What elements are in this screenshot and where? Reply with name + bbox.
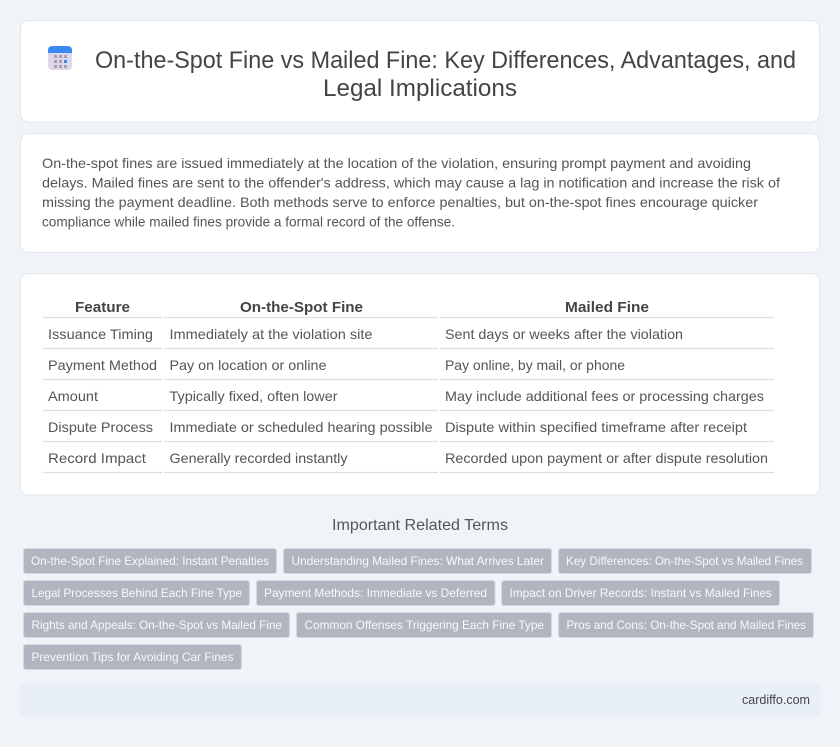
tag: Understanding Mailed Fines: What Arrives Later: [292, 554, 544, 568]
table row: issuance timing: Immediately at the violation site: [170, 326, 373, 342]
table row: record impact: Record Impact: [48, 450, 146, 466]
heading: important related terms: Important Related Terms: [332, 517, 508, 534]
table row: issuance timing: [48, 326, 683, 342]
tag: [24, 612, 290, 638]
tag: [24, 548, 276, 574]
footer bar: cardiffo.com: [742, 693, 810, 707]
table row: record impact: Recorded upon payment or after dispute resolution: [445, 450, 768, 466]
table row: amount: Typically fixed, often lower: [170, 388, 338, 404]
table row: dispute process: [48, 419, 747, 435]
table row: amount: May include additional fees or processing charges: [445, 388, 764, 404]
tag: Impact on Driver Records: Instant vs Mailed Fines: [510, 586, 772, 600]
title: Legal Implications: [323, 75, 517, 102]
table row: payment method: [48, 357, 625, 373]
tag: [558, 548, 812, 574]
title: On-the-Spot Fine vs Mailed Fine: Key Differences, Advantages, and: [95, 47, 796, 74]
table header row: On-the-Spot Fine: [240, 299, 363, 316]
panel: summary paragraph: delays. Mailed fines are sent to the offender's address, which may cause a lag in notification and increase the risk of: [42, 174, 780, 190]
tag: Legal Processes Behind Each Fine Type: [32, 586, 242, 600]
tag: [256, 580, 495, 606]
tag: [296, 612, 552, 638]
icon: calendar: [48, 46, 72, 70]
tag: [24, 580, 250, 606]
table row: record impact: Generally recorded instantly: [170, 450, 348, 466]
tag: On-the-Spot Fine Explained: Instant Penalties: [31, 554, 269, 568]
footer bar: [20, 683, 820, 717]
tag: Rights and Appeals: On-the-Spot vs Mailed Fine: [32, 618, 282, 632]
tag: Prevention Tips for Avoiding Car Fines: [32, 650, 234, 664]
table row: amount: Amount: [48, 388, 98, 404]
related term tags: [24, 548, 814, 670]
table row: dispute process: Immediate or scheduled hearing possible: [170, 419, 433, 435]
tag: Pros and Cons: On-the-Spot and Mailed Fines: [566, 618, 806, 632]
tag: Common Offenses Triggering Each Fine Type: [304, 618, 544, 632]
tag: [558, 612, 814, 638]
tag: [24, 644, 242, 670]
tag: [284, 548, 552, 574]
tag: Payment Methods: Immediate vs Deferred: [264, 586, 487, 600]
table row: amount: [48, 388, 764, 404]
panel: summary paragraph: missing the payment deadline. Both methods serve to enforce penalties, but on-the-spot fines encourage quicker: [42, 194, 758, 210]
table row: dispute process: Dispute within specified timeframe after receipt: [445, 419, 747, 435]
table row: payment method: Payment Method: [48, 357, 157, 373]
table header row: [75, 299, 649, 316]
panel: comparison table: [20, 274, 820, 495]
table header row: Feature: [75, 299, 130, 316]
table row: issuance timing: Sent days or weeks after the violation: [445, 326, 683, 342]
panel: summary paragraph: On-the-spot fines are issued immediately at the location of the violation, ensuring prompt payment and avoiding: [42, 155, 751, 171]
table row: record impact: [48, 450, 768, 466]
table row: issuance timing: Issuance Timing: [48, 326, 153, 342]
table header row: Mailed Fine: [565, 299, 649, 316]
title: [95, 47, 796, 102]
table row: dispute process: Dispute Process: [48, 419, 153, 435]
panel: title header: [20, 20, 820, 122]
table row: payment method: Pay on location or online: [170, 357, 327, 373]
tag: Key Differences: On-the-Spot vs Mailed Fines: [566, 554, 803, 568]
panel: summary paragraph: compliance while mailed fines provide a formal record of the offense.: [42, 214, 455, 230]
tag: [502, 580, 780, 606]
panel: summary paragraph: [20, 134, 820, 252]
table row: payment method: Pay online, by mail, or phone: [445, 357, 625, 373]
